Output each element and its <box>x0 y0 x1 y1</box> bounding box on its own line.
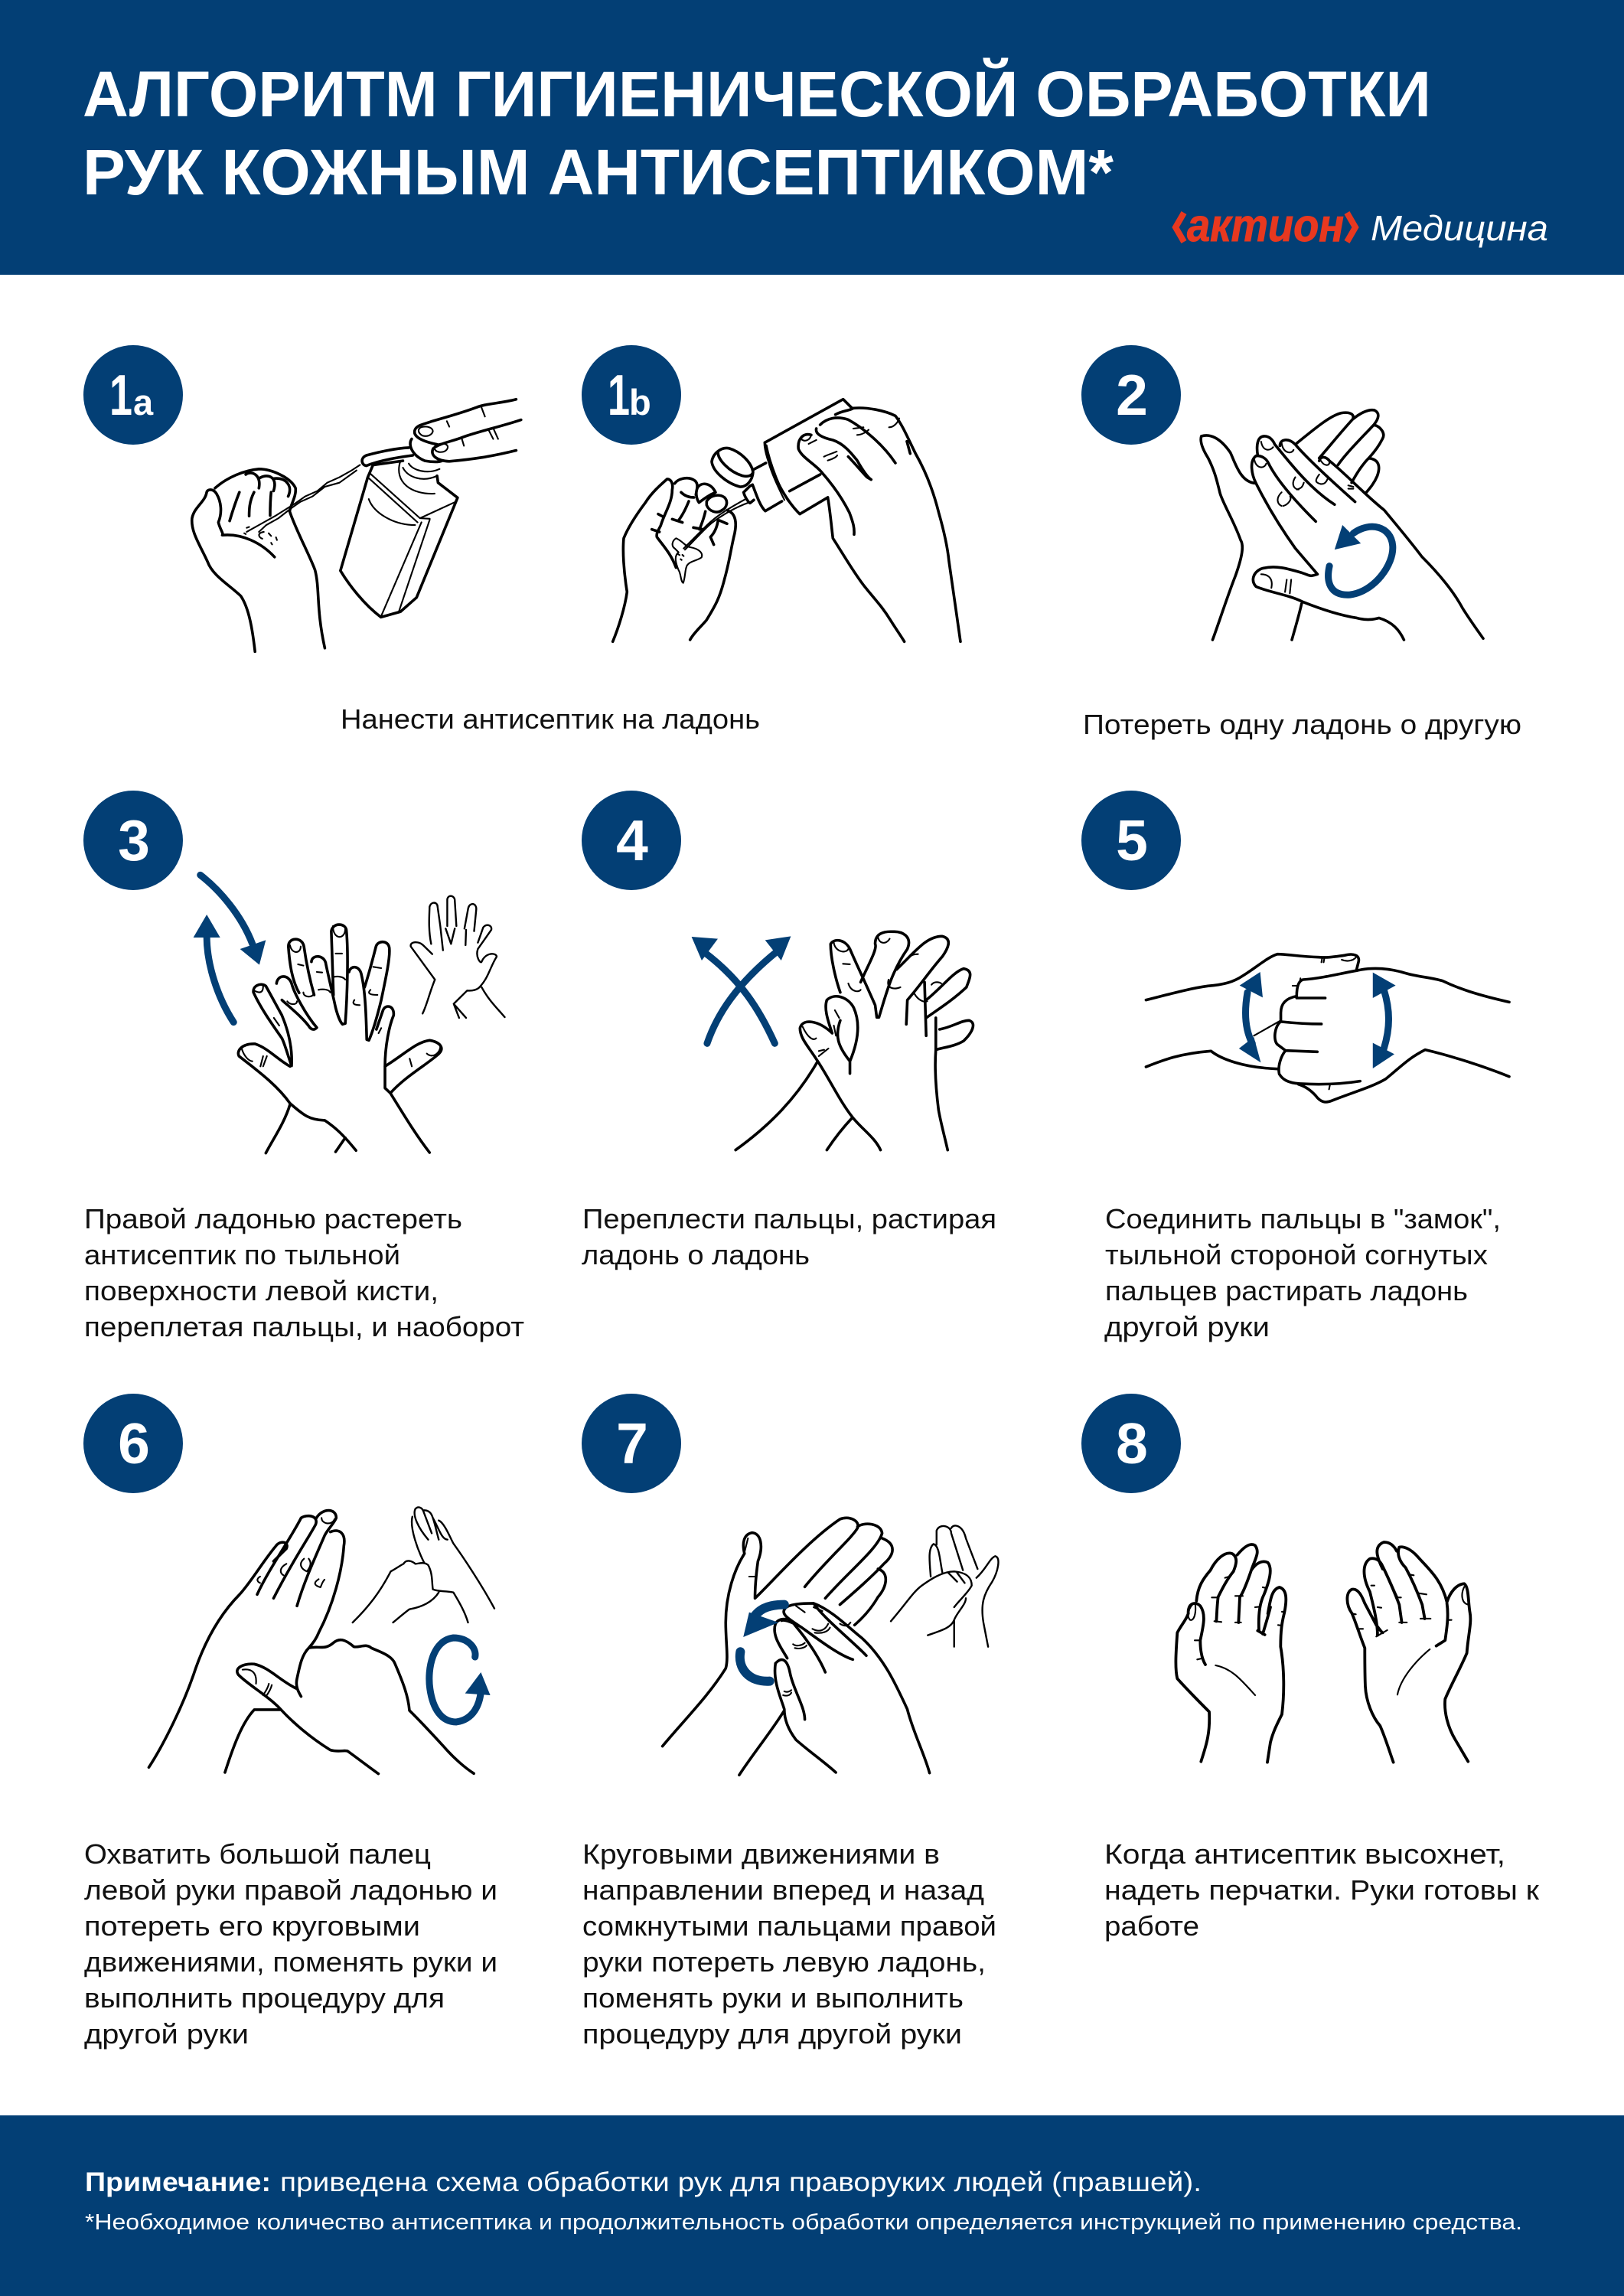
caption 3: Правой ладонью растереть <box>84 1203 462 1234</box>
caption 6 <box>84 1838 497 2050</box>
illustration: step 2, palm over palm with rotation arrow <box>1201 410 1483 640</box>
step badge 7: 7 <box>616 1411 648 1476</box>
caption 7: поменять руки и выполнить <box>582 1982 964 2014</box>
caption 6: потереть его круговыми <box>84 1910 420 1942</box>
illustration: step 6, grasping thumb with rotation arrow <box>148 1507 494 1774</box>
caption 6: другой руки <box>84 2018 249 2050</box>
step badge 5 <box>1081 791 1181 890</box>
caption 5: пальцев растирать ладонь <box>1105 1275 1468 1306</box>
illustration: step 4, interlaced fingers with crossing arrows <box>692 931 973 1150</box>
illustration: step 3, fingers interlaced over back of hand <box>194 875 504 1153</box>
caption 2: Потереть одну ладонь о другую <box>1083 709 1521 740</box>
step badge 5: 5 <box>1116 808 1148 872</box>
caption 4: ладонь о ладонь <box>582 1239 810 1270</box>
illustration: step 1b, bottle tilted over palm <box>613 400 960 641</box>
caption 6: левой руки правой ладонью и <box>84 1874 497 1906</box>
illustration: step 5, locked fingers with arrows <box>1146 954 1509 1102</box>
caption 3: переплетая пальцы, и наоборот <box>84 1311 524 1342</box>
caption 5: другой руки <box>1104 1311 1270 1342</box>
caption 7: сомкнутыми пальцами правой <box>582 1910 996 1942</box>
caption 8 <box>1104 1838 1539 1942</box>
caption 7 <box>582 1838 996 2050</box>
step badge 1a <box>83 345 183 445</box>
step badge 7 <box>582 1394 681 1493</box>
caption 8: Когда антисептик высохнет, <box>1104 1838 1505 1870</box>
footer note panel <box>0 2115 1624 2296</box>
caption 7: Круговыми движениями в <box>582 1838 940 1870</box>
caption 4 <box>582 1203 996 1270</box>
caption 3 <box>84 1203 524 1342</box>
caption 8: надеть перчатки. Руки готовы к <box>1104 1874 1539 1906</box>
logo <box>1176 200 1548 251</box>
title: РУК КОЖНЫМ АНТИСЕПТИКОМ* <box>83 136 1114 208</box>
title: АЛГОРИТМ ГИГИЕНИЧЕСКОЙ ОБРАБОТКИ <box>83 58 1431 130</box>
step badge 2 <box>1081 345 1181 445</box>
title <box>83 58 1431 208</box>
footer note: Примечание: <box>85 2167 271 2197</box>
caption 1a/1b: Нанести антисептик на ладонь <box>341 703 760 735</box>
step badge 1a: 1 <box>109 363 132 427</box>
illustration: step 8, two dry open hands <box>1176 1542 1470 1763</box>
caption 7: процедуру для другой руки <box>582 2018 962 2050</box>
caption 5: тыльной стороной согнутых <box>1105 1239 1488 1270</box>
step badge 4 <box>582 791 681 890</box>
footer note: приведена схема обработки рук для праворуких людей (правшей). <box>280 2167 1202 2197</box>
step badge 1b: 1 <box>608 363 630 427</box>
caption 5: Соединить пальцы в "замок", <box>1105 1203 1501 1234</box>
step badge 8 <box>1081 1394 1181 1493</box>
footnote: *Необходимое количество антисептика и продолжительность обработки определяется инструкцией по применению средства. <box>85 2210 1522 2235</box>
caption 7: направлении вперед и назад <box>582 1874 984 1906</box>
caption 7: руки потереть левую ладонь, <box>582 1946 986 1978</box>
caption 6: движениями, поменять руки и <box>84 1946 497 1978</box>
caption 3: антисептик по тыльной <box>84 1239 400 1270</box>
step badge 2: 2 <box>1116 363 1148 427</box>
caption 6: выполнить процедуру для <box>84 1982 445 2014</box>
illustration: step 1a, pump bottle over palm <box>192 400 521 651</box>
step badge 6: 6 <box>118 1411 150 1476</box>
logo: актион <box>1187 200 1344 251</box>
caption 8: работе <box>1104 1910 1199 1942</box>
step badge 1b: b <box>629 382 651 422</box>
step badge 1b <box>582 345 681 445</box>
illustration: step 7, fingertips rubbing palm with arrow <box>663 1518 998 1775</box>
step badge 8: 8 <box>1116 1411 1148 1476</box>
logo: Медицина <box>1371 208 1548 248</box>
step badge 4: 4 <box>616 808 648 872</box>
step badge 3 <box>83 791 183 890</box>
caption 5 <box>1104 1203 1501 1342</box>
caption 3: поверхности левой кисти, <box>84 1275 439 1306</box>
step badge 3: 3 <box>118 808 150 872</box>
step badge 6 <box>83 1394 183 1493</box>
caption 6: Охватить большой палец <box>84 1838 431 1870</box>
step badge 1a: a <box>133 382 154 422</box>
header banner <box>0 0 1624 275</box>
caption 4: Переплести пальцы, растирая <box>582 1203 996 1234</box>
